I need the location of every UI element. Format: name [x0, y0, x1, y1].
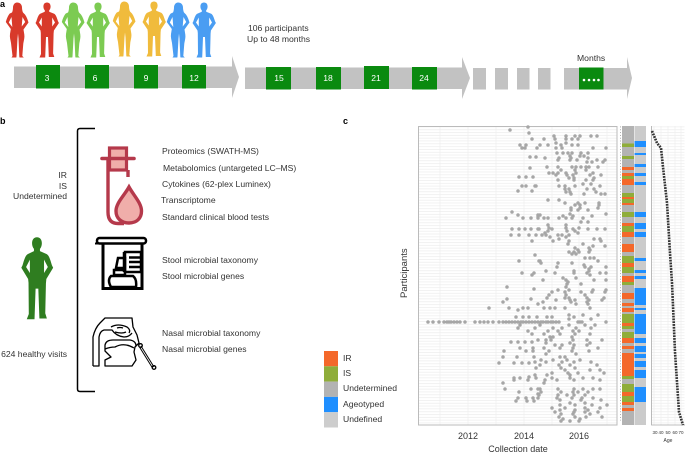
omics list: blood: Standard clinical blood tests — [162, 212, 269, 222]
omics list: nasal: Nasal microbial genes — [162, 344, 247, 354]
timeline arrow 1 — [14, 56, 239, 98]
timeline arrow 2: 18 — [323, 73, 333, 83]
annotation strip: ageotyped — [620, 126, 646, 425]
omics list: nasal — [162, 328, 261, 354]
age axis labels — [652, 430, 684, 444]
panel a: study timeline — [6, 2, 632, 99]
x axis years: 2016 — [569, 431, 589, 441]
icon: blood test tube — [102, 148, 142, 224]
age axis labels: 30 — [652, 430, 658, 435]
omics list: blood: Cytokines (62-plex Luminex) — [162, 179, 271, 189]
age axis labels: 70 — [678, 430, 684, 435]
timeline arrow 2: 21 — [371, 73, 381, 83]
age axis labels: 50 — [665, 430, 671, 435]
insulin status groups — [13, 170, 67, 201]
timeline arrow 1: 12 — [189, 73, 199, 83]
omics list: nasal: Nasal microbial taxonomy — [162, 328, 261, 338]
study summary text: Up to 48 months — [247, 34, 310, 44]
visit count: 624 healthy visits — [1, 349, 67, 359]
age axis labels: 60 — [672, 430, 678, 435]
panel c label: c — [343, 116, 348, 126]
timeline arrow 2 — [245, 57, 470, 99]
timeline arrow 3 — [564, 57, 632, 99]
omics list: blood: Metabolomics (untargeted LC–MS) — [163, 163, 296, 173]
panel b label: b — [0, 116, 6, 126]
x axis years: 2012 — [458, 431, 478, 441]
x axis years: 2014 — [514, 431, 534, 441]
panel b: sampling overview — [1, 128, 296, 392]
age panel — [652, 126, 685, 425]
insulin status groups: IR — [58, 170, 67, 180]
omics list: stool: Stool microbial taxonomy — [162, 255, 259, 265]
study summary text — [247, 23, 310, 44]
timeline arrow 2: 24 — [419, 73, 429, 83]
insulin status groups: IS — [59, 181, 67, 191]
legend: Ageotyped — [343, 399, 384, 409]
legend: IS — [343, 368, 351, 378]
y axis title: Participants — [399, 248, 410, 298]
scatter points: sample collection dates — [428, 127, 607, 421]
participant silhouettes — [6, 2, 216, 58]
omics list: blood — [161, 146, 296, 222]
panel c: collection date chart — [324, 126, 685, 453]
omics list: blood: Proteomics (SWATH-MS) — [162, 146, 259, 156]
omics list: stool — [162, 255, 259, 281]
legend: Undetermined — [343, 383, 397, 393]
omics list: stool: Stool microbial genes — [162, 271, 244, 281]
scatter plot background and grid — [416, 126, 617, 425]
annotation strip: insulin status — [622, 126, 634, 425]
icon: green person — [21, 237, 53, 319]
timeline arrow 1: 9 — [144, 73, 149, 83]
legend: Undefined — [343, 414, 382, 424]
age curve — [652, 131, 683, 425]
icon: stool container — [95, 238, 146, 288]
months label: Months — [577, 53, 605, 63]
study summary text: 106 participants — [248, 23, 309, 33]
legend: IR — [343, 353, 352, 363]
legend — [324, 351, 397, 428]
timeline arrow 1: 6 — [93, 73, 98, 83]
timeline gap segments — [473, 68, 550, 90]
omics list: blood: Transcriptome — [161, 195, 216, 205]
timeline arrow 2: 15 — [274, 73, 284, 83]
timeline arrow 1: 3 — [45, 73, 50, 83]
insulin status groups: Undetermined — [13, 191, 67, 201]
x axis years — [458, 431, 589, 441]
bracket — [78, 128, 95, 392]
age axis labels: Age — [664, 438, 673, 444]
age axis labels: 40 — [658, 430, 664, 435]
icon: nasal cavity and swab — [93, 318, 156, 369]
